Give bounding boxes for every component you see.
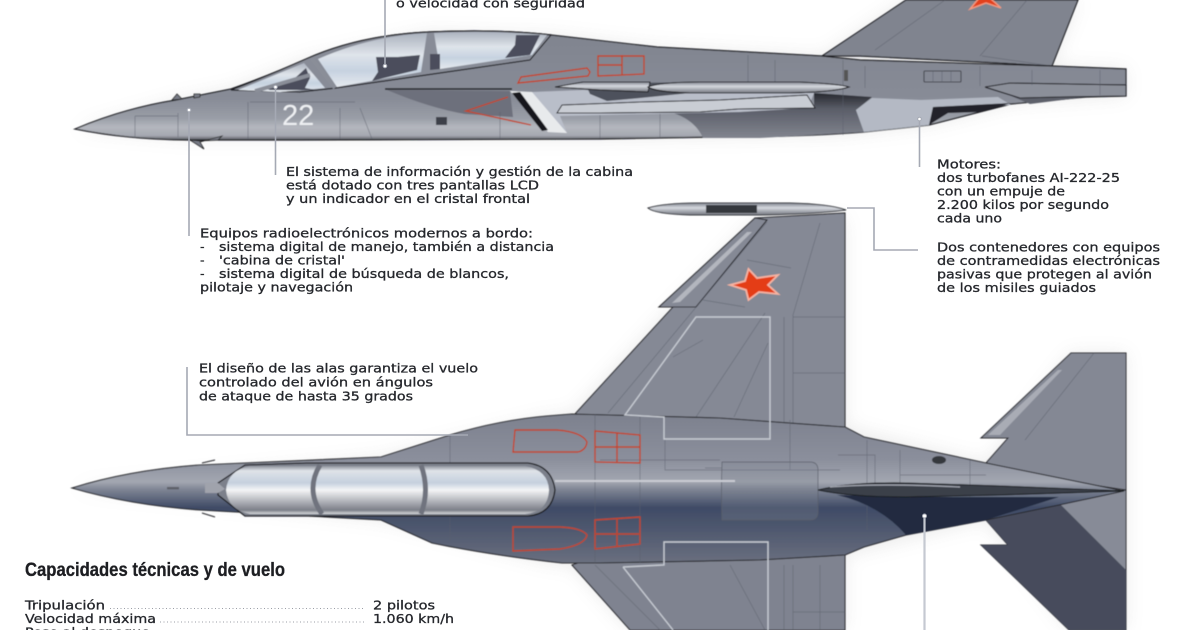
text: avionics: - [200, 266, 205, 281]
text: countermeasure pods: Dos contenedores con equipos [937, 240, 1160, 254]
plan view: red canoe lower [513, 527, 587, 551]
plan view: tail panel line [1025, 353, 1094, 440]
side view: small vent [436, 117, 447, 125]
leader line: cockpit callout [383, 0, 387, 68]
text: engines: dos turbofanes AI-222-25 [937, 170, 1120, 185]
plan view: nose side probes [202, 460, 215, 517]
text: countermeasure pods: de los misiles guiados [937, 280, 1096, 295]
plan view: lower wing outlined panel [623, 542, 768, 630]
plan view aircraft [72, 203, 1126, 630]
plan view: fuselage [72, 414, 1124, 563]
leader line: wing design [187, 367, 468, 435]
text: engines: 2.200 kilos por segundo [937, 197, 1109, 212]
side view: front windshield [238, 63, 325, 92]
plan view: red grid upper [595, 431, 640, 463]
text: wing design: de ataque de hasta 35 grados [199, 388, 413, 404]
plan view: canopy bars [313, 465, 426, 514]
text: cabin information system: está dotado con tres pantallas LCD [286, 178, 539, 192]
side view: red marking triangle [466, 97, 531, 125]
plan view: rear dark shadow [837, 495, 1059, 535]
spec row: top speed: 1.060 km/h [373, 611, 454, 626]
side view: dark lower shading behind wing [673, 93, 872, 138]
plan view: canopy surround [218, 463, 555, 516]
side view: missile shape [557, 95, 815, 113]
side view: red panel long [518, 68, 590, 83]
plan view: spine highlight [830, 485, 960, 487]
plan view: tail upper [981, 353, 1126, 490]
plan view: wing pod [648, 203, 846, 215]
side view: intake black lip [512, 92, 548, 131]
plan view: wing lower [572, 555, 845, 630]
plan view: wing outlined panel [625, 317, 770, 439]
text: countermeasure pods [937, 240, 1160, 295]
side view: intake white strip [510, 91, 567, 133]
leader line: avionics [187, 108, 191, 236]
leader line: countermeasure pods [847, 208, 918, 250]
side view: wing glove [555, 82, 650, 92]
text: avionics [200, 226, 554, 294]
side view: rear cockpit glass [434, 32, 547, 69]
plan view: pod grille [706, 205, 757, 213]
leader line: engines [918, 117, 921, 167]
text: cabin information system [286, 164, 633, 206]
side view: tail boom shade [985, 84, 1126, 104]
side view: number 22: 22 [282, 100, 314, 132]
heading: technical capabilities: Capacidades técnicas y de vuelo [25, 560, 285, 581]
side view: vent block [844, 70, 961, 82]
text: avionics: - [200, 239, 205, 254]
plan view: lower wing panel lines [595, 565, 845, 630]
plan view: tail lower [981, 490, 1126, 630]
plan view: engine fairing [722, 462, 818, 520]
plan view: dorsal spine [818, 483, 1124, 497]
plan view: tail upper slat highlight [988, 370, 1062, 435]
spec row: crew: 2 pilotos [373, 598, 435, 612]
plan view: central highlight [555, 480, 735, 482]
text: engines: cada uno [937, 210, 1002, 226]
side view: intake pale area [532, 90, 814, 133]
text: avionics: 'cabina de cristal' [219, 252, 345, 268]
spec row: top speed [25, 611, 454, 626]
plan view: slat upper [659, 218, 767, 307]
text: avionics: - [200, 252, 205, 268]
side view: nose probes [172, 94, 222, 149]
text: avionics: pilotaje y navegación [200, 280, 353, 294]
text: wing design [199, 360, 478, 404]
plan view: slat highlight [672, 232, 752, 303]
plan view: wing panel lines [608, 222, 845, 427]
plan view: red canoe upper [513, 430, 587, 452]
side view: front cockpit glass [318, 33, 427, 87]
text: avionics: sistema digital de manejo, también a distancia [219, 239, 554, 254]
spec table [24, 598, 454, 630]
side view: underside shade [387, 90, 513, 117]
plan view: fuselage panel lines [450, 414, 986, 563]
side view: red panel grid [598, 55, 644, 76]
side view: wing pod [648, 82, 849, 93]
text: cabin information system: El sistema de información y gestión de la cabina [286, 164, 633, 179]
text: engines: Motores: [937, 156, 1001, 172]
side view: engine nozzle [929, 103, 1011, 125]
text: wing design: controlado del avión en ángulos [199, 374, 433, 390]
spec row: top speed: Velocidad máxima [25, 611, 156, 626]
text: countermeasure pods: de contramedidas electrónicas [937, 253, 1160, 268]
plan view: dorsal hatch [932, 456, 946, 464]
plan view: wing upper surface [575, 213, 845, 432]
plan view: nose markings [205, 483, 225, 493]
leader line: cabin system [274, 85, 277, 175]
side view: tail fin [822, 0, 1078, 66]
text: wing design: El diseño de las alas garantiza el vuelo [199, 360, 478, 376]
side view: fuselage [75, 31, 1126, 140]
plan view: red star on wing [730, 269, 778, 300]
spec row: crew: Tripulación [24, 598, 105, 612]
text: engines [937, 156, 1120, 226]
side view: fin panel line [875, 0, 1052, 66]
plan view: red grid lower [595, 517, 640, 549]
side view: red star on fin [970, 0, 1001, 9]
text: avionics: sistema digital de búsqueda de blancos, [219, 266, 509, 281]
plan view: nose pitot [167, 487, 179, 489]
side view: canopy strut [255, 59, 335, 91]
side view aircraft [75, 0, 1126, 149]
side view: canopy frame [231, 31, 551, 92]
side view: wing glove dark [585, 82, 760, 101]
plan view: canopy glass [226, 466, 549, 514]
plan view: tail lower shaded band [981, 497, 1126, 630]
side view: panel lines [135, 55, 1100, 139]
side view: fuselage black divider [385, 88, 512, 90]
side view: engine nacelle [856, 97, 1011, 132]
spec row: crew [24, 598, 435, 612]
side view: pilot seats [265, 35, 540, 90]
text: engines: con un empuje de [937, 184, 1065, 198]
text: avionics: Equipos radioelectrónicos modernos a bordo: [200, 226, 533, 240]
side view: tailplane [985, 83, 1126, 98]
text: countermeasure pods: pasivas que protegen al avión [937, 266, 1152, 282]
text: cabin information system: y un indicador en el cristal frontal [286, 191, 530, 206]
leader line: bottom callout [922, 514, 926, 630]
